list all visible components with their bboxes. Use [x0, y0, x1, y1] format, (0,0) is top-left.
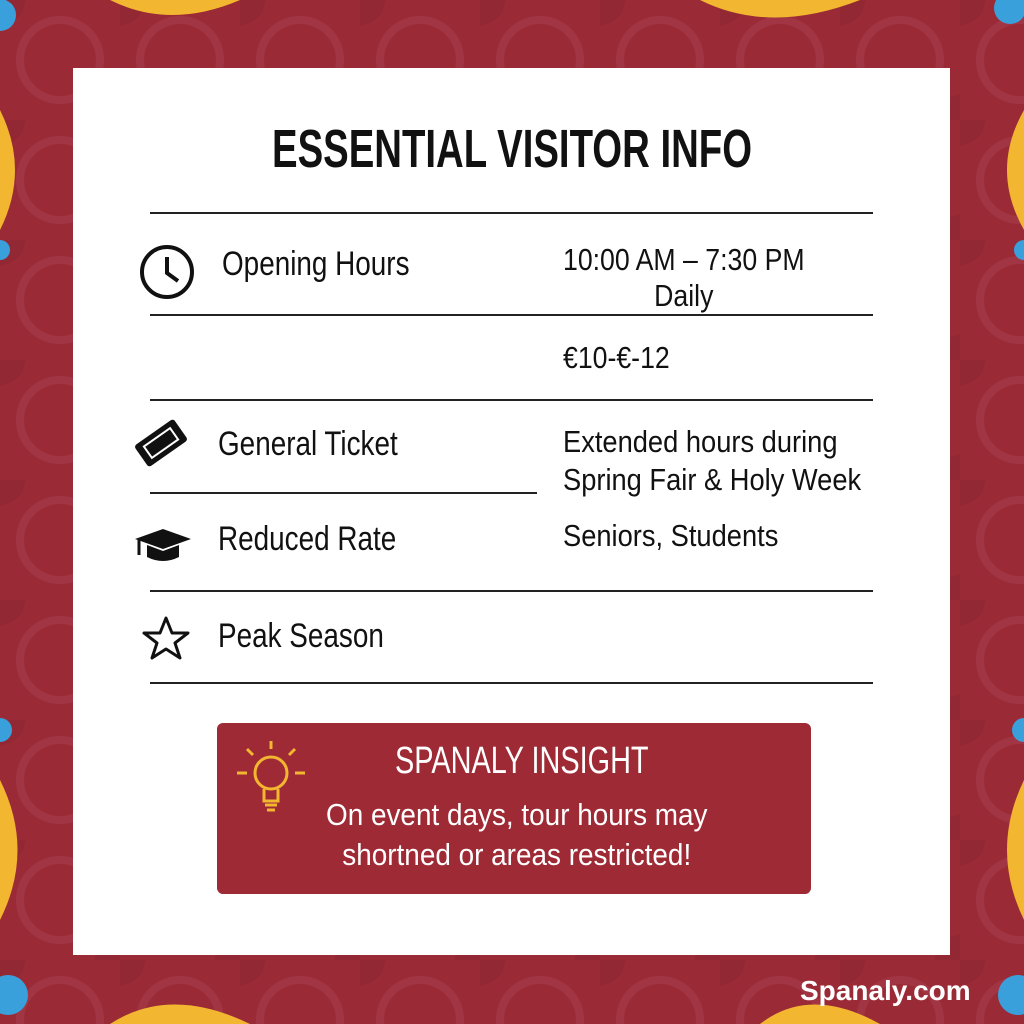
icon: lightbulb: [237, 741, 305, 812]
icon: clock: [140, 245, 194, 299]
insight heading: SPANALY INSIGHT: [395, 740, 649, 782]
value: extended hours: Spring Fair & Holy Week: [563, 462, 861, 497]
insight text: [326, 797, 708, 872]
callout: insight box: [217, 723, 811, 894]
title: ESSENTIAL VISITOR INFO: [272, 119, 752, 179]
value: extended hours: Extended hours during: [563, 424, 838, 459]
value: price: €10-€-12: [563, 340, 670, 375]
brand: spanaly.com: Spanaly.com: [800, 975, 971, 1006]
value: extended hours: [563, 424, 862, 497]
icon: ticket: [135, 420, 187, 466]
insight text: On event days, tour hours may: [326, 797, 707, 832]
value: seniors: Seniors, Students: [563, 518, 778, 553]
value: hours: 10:00 AM – 7:30 PM: [563, 242, 805, 277]
label: peak season: Peak Season: [218, 617, 384, 655]
icon: star: [142, 616, 190, 660]
icon: graduation cap: [135, 529, 191, 561]
label: reduced rate: Reduced Rate: [218, 520, 396, 558]
label: general ticket: General Ticket: [218, 425, 398, 463]
value: hours: [563, 242, 805, 313]
insight text: shortned or areas restricted!: [342, 837, 691, 872]
label: opening hours: Opening Hours: [222, 245, 410, 283]
value: hours: Daily: [654, 278, 713, 313]
white card: [73, 68, 950, 955]
